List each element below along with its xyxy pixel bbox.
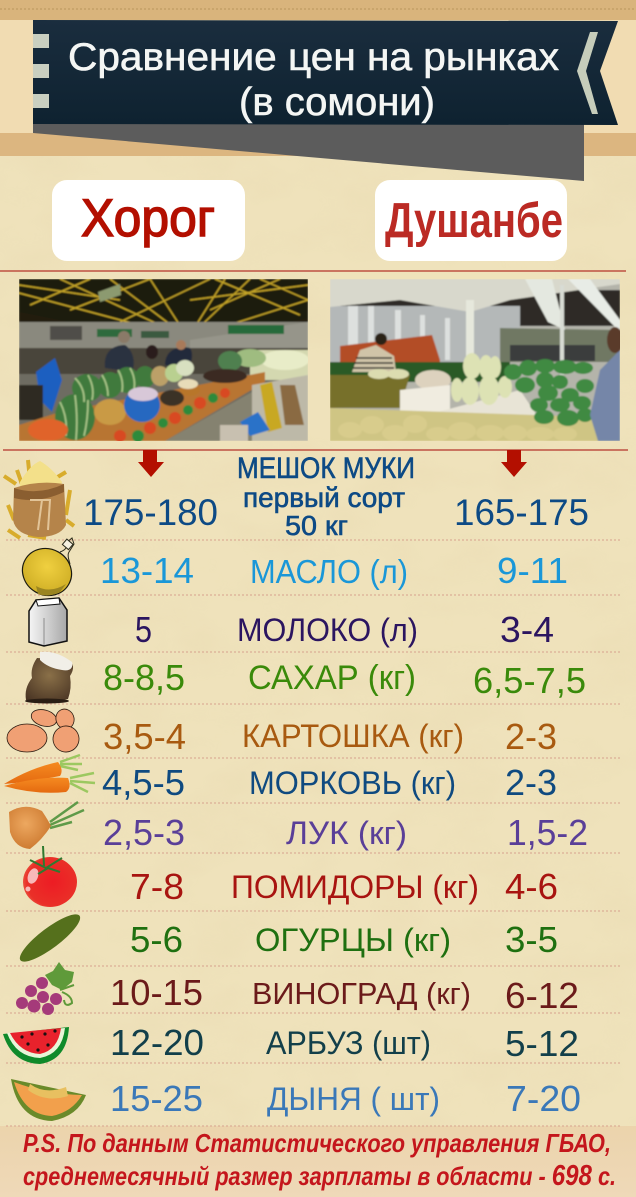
- arrow: Khorog column: [138, 450, 164, 477]
- row: tomato: 4-6: [505, 866, 558, 907]
- icon: grapes: [16, 962, 74, 1015]
- row: watermelon: 12-20: [110, 1022, 204, 1063]
- row: oil: 9-11: [497, 550, 568, 591]
- photo: Dushanbe market: [330, 279, 623, 441]
- row: potato: 3,5-4: [103, 716, 186, 757]
- row: flour: 175-180: [83, 492, 218, 533]
- row: grapes: ВИНОГРАД (кг): [252, 976, 471, 1011]
- icon: melon slice: [11, 1079, 86, 1121]
- row: milk: МОЛОКО (л): [237, 612, 418, 648]
- row: onion: 1,5-2: [507, 812, 588, 853]
- row: flour: [4, 452, 589, 541]
- icon: milk carton: [29, 598, 67, 646]
- postscript note: среднемесячный размер зарплаты в области - 698 с.: [23, 1160, 616, 1192]
- icon: carrots: [4, 755, 95, 793]
- title: Сравнение цен на рынках: [68, 36, 560, 79]
- row: potato: КАРТОШКА (кг): [242, 718, 464, 754]
- icon: watermelon slice: [3, 1027, 69, 1064]
- city label: Хорог: [52, 180, 245, 261]
- row: carrot: 4,5-5: [102, 762, 185, 803]
- icon: flour sack: [4, 460, 74, 538]
- row: flour: 50 кг: [285, 510, 348, 541]
- row: melon: 15-25: [110, 1078, 203, 1119]
- icon: cucumber: [14, 908, 86, 968]
- row: carrot: [4, 755, 557, 803]
- row: carrot: МОРКОВЬ (кг): [249, 765, 456, 801]
- row: sugar: [25, 652, 586, 704]
- city label: Хорог: Хорог: [81, 189, 215, 248]
- city label: Душанбе: Душанбе: [385, 194, 563, 248]
- icon: tomato: [23, 846, 77, 907]
- row: melon: 7-20: [506, 1078, 581, 1119]
- row: onion: [9, 802, 588, 853]
- row: milk: [29, 598, 554, 650]
- postscript note: [23, 1128, 616, 1192]
- row: melon: ДЫНЯ ( шт): [267, 1081, 440, 1117]
- row: oil: [14, 538, 568, 604]
- row: oil: МАСЛО (л): [250, 553, 408, 590]
- row: grapes: [16, 962, 579, 1016]
- city label: Душанбе: [375, 180, 567, 261]
- row: cucumber: ОГУРЦЫ (кг): [255, 922, 451, 958]
- row: cucumber: [14, 908, 558, 968]
- row: tomato: ПОМИДОРЫ (кг): [231, 869, 479, 905]
- arrow: Dushanbe column: [501, 450, 527, 477]
- row: sugar: 8-8,5: [103, 657, 185, 698]
- icon: potatoes: [7, 707, 83, 756]
- row: onion: 2,5-3: [103, 812, 185, 853]
- row: watermelon: [3, 1022, 579, 1064]
- row: melon: [11, 1078, 581, 1121]
- row: carrot: 2-3: [505, 762, 557, 803]
- icon: oil bottle: [14, 538, 80, 604]
- row: cucumber: 5-6: [130, 919, 183, 960]
- title: (в сомони): [239, 81, 435, 124]
- row: oil: 13-14: [100, 550, 194, 591]
- row: flour: МЕШОК МУКИ: [237, 452, 415, 485]
- row: milk: 3-4: [500, 609, 554, 650]
- title banner: [33, 20, 618, 125]
- row: watermelon: АРБУЗ (шт): [266, 1025, 431, 1061]
- row: tomato: 7-8: [130, 866, 184, 907]
- row: flour: первый сорт: [243, 482, 405, 513]
- banner shadow: [33, 124, 584, 181]
- icon: sugar sack: [25, 652, 73, 704]
- row: watermelon: 5-12: [505, 1023, 579, 1064]
- photo: Khorog market: [19, 279, 309, 442]
- row: grapes: 10-15: [110, 972, 203, 1013]
- row: sugar: САХАР (кг): [248, 659, 416, 697]
- row: potato: 2-3: [505, 716, 557, 757]
- row: flour: 165-175: [454, 492, 589, 533]
- row: milk: 5: [135, 609, 152, 650]
- row: potato: [7, 707, 557, 757]
- row: cucumber: 3-5: [505, 919, 558, 960]
- icon: onion: [9, 802, 84, 849]
- title: [68, 36, 560, 124]
- row: sugar: 6,5-7,5: [473, 660, 586, 701]
- row: tomato: [23, 846, 558, 907]
- row lines: [6, 540, 620, 1126]
- row: onion: ЛУК (кг): [286, 815, 407, 851]
- row: grapes: 6-12: [505, 975, 579, 1016]
